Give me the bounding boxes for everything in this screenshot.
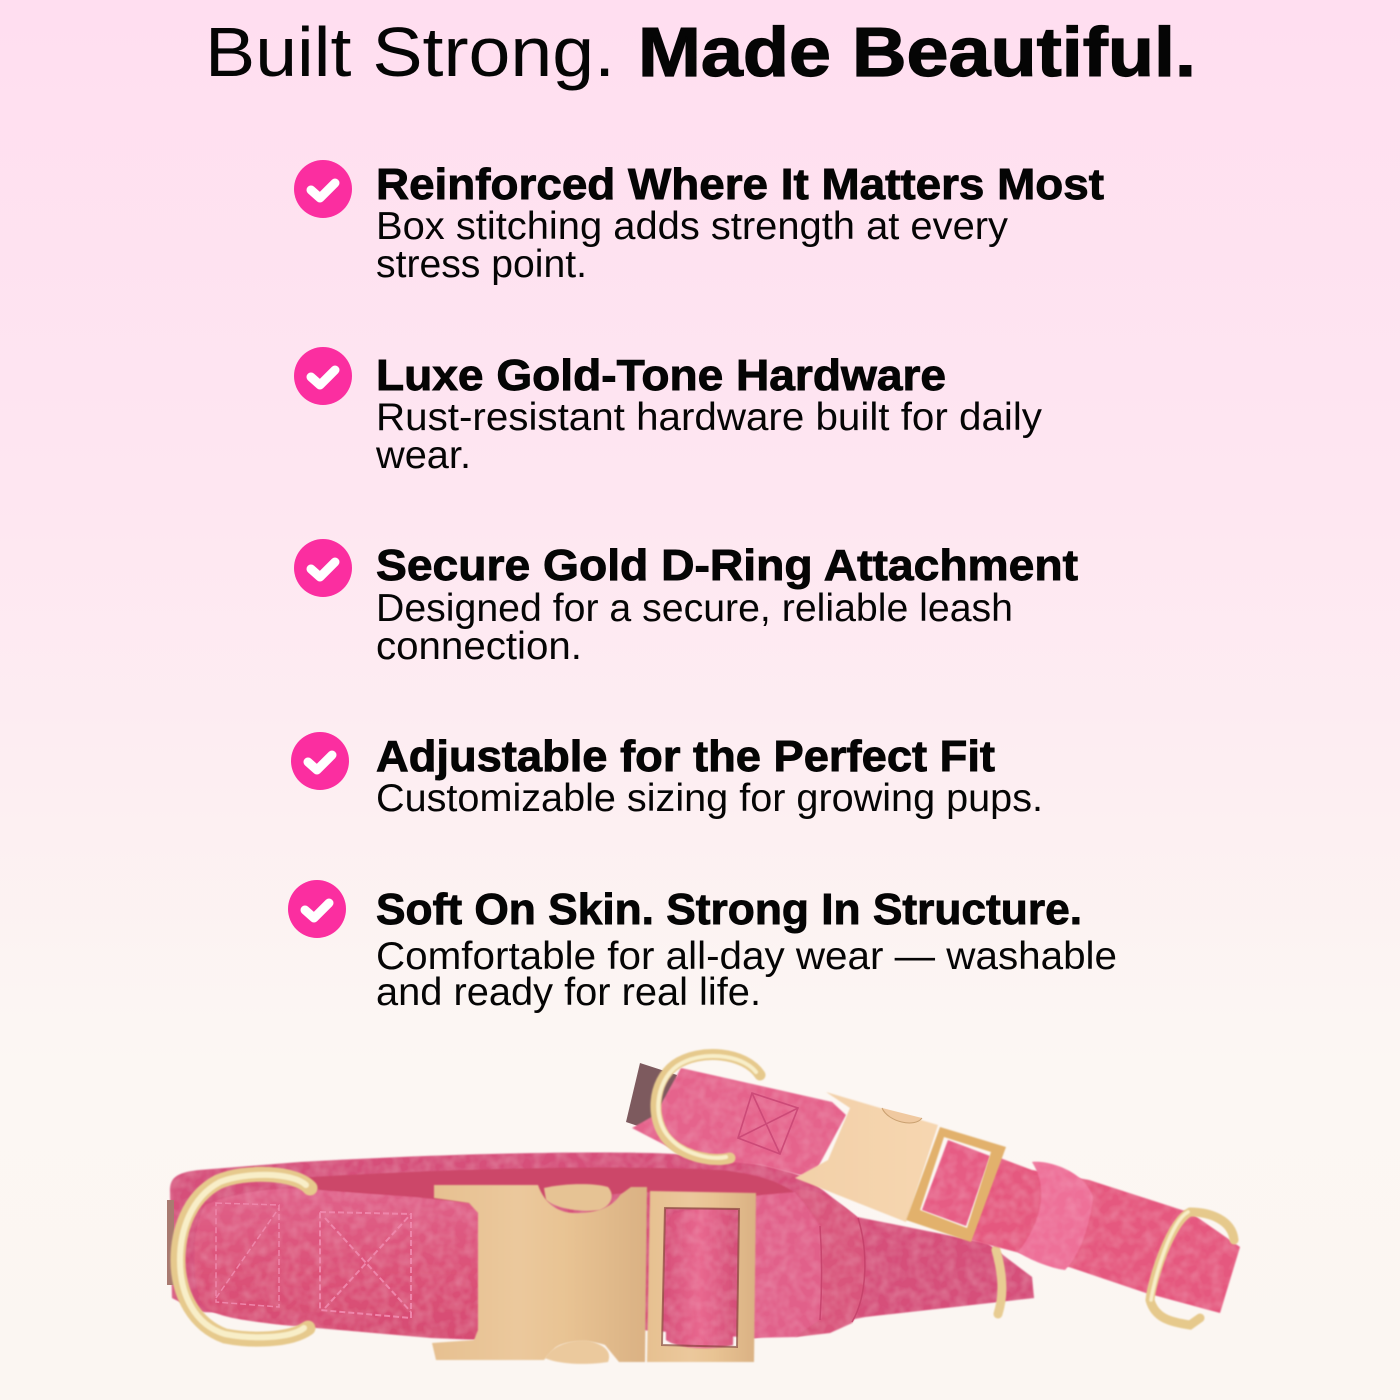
description: Box stitching adds strength at every xyxy=(376,205,1008,248)
icon: check badge xyxy=(288,880,346,938)
feature: d-ring xyxy=(294,539,1078,668)
heading: Reinforced Where It Matters Most xyxy=(376,160,1104,209)
keeper loop xyxy=(1018,1162,1093,1270)
small ring xyxy=(996,1250,1002,1314)
heading: Soft On Skin. Strong In Structure. xyxy=(376,885,1082,934)
buckle bottom button xyxy=(545,1340,609,1364)
D-ring xyxy=(656,1055,760,1159)
inner band shade xyxy=(300,1168,800,1205)
keeper loop xyxy=(795,1190,865,1337)
strap through slider xyxy=(666,1209,735,1348)
slider opening shadow xyxy=(662,1208,739,1347)
strap with D-ring end xyxy=(632,1068,846,1178)
woven label xyxy=(626,1063,677,1135)
icon: check badge xyxy=(294,347,352,405)
description: stress point. xyxy=(376,243,587,286)
stitched box xyxy=(738,1093,798,1154)
description xyxy=(376,205,1008,286)
description: and ready for real life. xyxy=(376,971,761,1014)
description: Customizable sizing for growing pups. xyxy=(376,777,1043,820)
description xyxy=(376,587,1013,668)
description xyxy=(376,935,1117,1014)
title: Built Strong. xyxy=(205,13,615,91)
buckle notch xyxy=(882,1108,922,1123)
product photo: small pink collar xyxy=(626,1055,1240,1325)
feature: soft xyxy=(288,880,1117,1014)
description xyxy=(375,396,1043,477)
description: Comfortable for all-day wear — washable xyxy=(376,935,1117,978)
icon: check badge xyxy=(294,539,352,597)
title xyxy=(205,13,1196,91)
feature: adjustable xyxy=(291,732,1043,820)
description: wear. xyxy=(375,434,471,477)
description: Rust-resistant hardware built for daily xyxy=(376,396,1043,439)
feature: hardware xyxy=(294,347,1043,477)
buckle top button xyxy=(544,1184,612,1211)
adjuster ring xyxy=(1150,1212,1234,1325)
woven label edge xyxy=(167,1200,174,1285)
heading: Secure Gold D-Ring Attachment xyxy=(376,541,1078,590)
buckle xyxy=(795,1092,938,1222)
stitched box left xyxy=(216,1203,279,1307)
stitched box xyxy=(320,1212,411,1318)
collar back band xyxy=(170,1152,1034,1338)
band right of slider xyxy=(750,1192,825,1338)
product photo: large pink collar xyxy=(167,1152,1034,1364)
icon: check badge xyxy=(291,732,349,790)
slider xyxy=(906,1127,1006,1242)
description: connection. xyxy=(376,625,582,668)
slider xyxy=(647,1191,756,1362)
keeper seams xyxy=(820,1218,865,1322)
buckle xyxy=(432,1185,647,1362)
title: Made Beautiful. xyxy=(638,13,1196,91)
heading: Luxe Gold-Tone Hardware xyxy=(376,351,946,400)
feature: reinforced xyxy=(294,160,1104,286)
strap through slider xyxy=(922,1140,990,1226)
strap far end xyxy=(970,1158,1240,1313)
heading: Adjustable for the Perfect Fit xyxy=(376,732,995,781)
D-ring xyxy=(178,1174,310,1339)
icon: check badge xyxy=(294,160,352,218)
description: Designed for a secure, reliable leash xyxy=(376,587,1013,630)
feature list xyxy=(288,160,1117,1014)
front strap xyxy=(195,1189,480,1340)
